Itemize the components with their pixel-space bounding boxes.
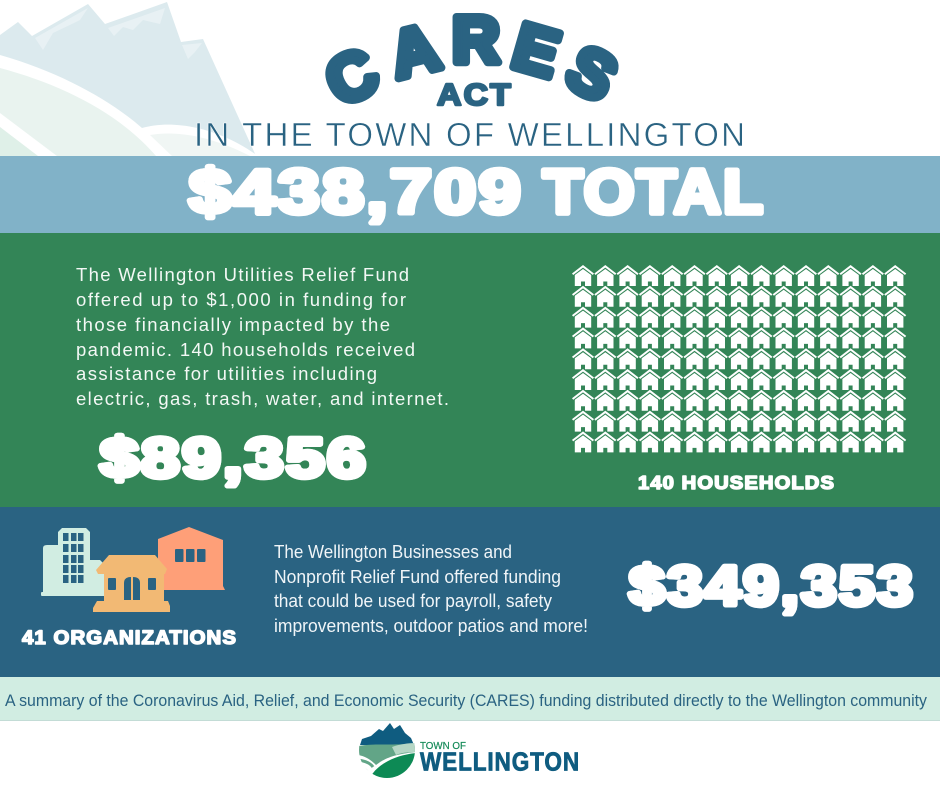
business description text: that could be used for payroll, safety [274, 591, 552, 611]
logo emblem [358, 723, 416, 780]
utilities description text: electric, gas, trash, water, and internet. [76, 388, 449, 409]
title: CARES: E [505, 8, 568, 92]
utilities description text: those financially impacted by the [76, 314, 390, 335]
icon: orange warehouse [158, 527, 225, 590]
business description text: Nonprofit Relief Fund offered funding [274, 567, 561, 587]
utilities description text: The Wellington Utilities Relief Fund [76, 264, 409, 285]
title: CARES: S [555, 30, 629, 116]
total band: $438,709 [189, 158, 523, 227]
business description text: improvements, outdoor patios and more! [274, 616, 588, 636]
subtitle: IN THE TOWN OF WELLINGTON [194, 116, 745, 153]
organizations label: 41 ORGANIZATIONS [22, 628, 237, 649]
title: CARES: R [452, 2, 500, 76]
total band [0, 156, 940, 233]
utilities description text: assistance for utilities including [76, 363, 377, 384]
business description text: The Wellington Businesses and [274, 542, 512, 562]
business description text [274, 542, 588, 636]
panel: business relief [0, 507, 940, 677]
title: ACT: ACT [437, 77, 513, 112]
utilities description text: offered up to $1,000 in funding for [76, 289, 406, 310]
logo wordmark: Wellington: WELLINGTON [420, 746, 580, 776]
logo: Town of Wellington [358, 723, 580, 780]
utilities description text: pandemic. 140 households received [76, 339, 415, 360]
business amount: $349,353 [629, 554, 915, 617]
title: CARES: C [314, 33, 390, 120]
total band: TOTAL [543, 158, 765, 227]
icon grid: households [572, 265, 906, 452]
title: CARES [314, 2, 629, 120]
icon: tan storefront [93, 555, 170, 612]
icon: office tower [41, 528, 107, 596]
households label: 140 HOUSEHOLDS [638, 473, 835, 493]
summary strip [0, 677, 940, 721]
background mountains and hills [0, 2, 258, 156]
utilities amount: $89,356 [100, 426, 368, 489]
utilities description text [76, 264, 449, 409]
title: CARES: A [382, 9, 447, 92]
logo wordmark: town of: TOWN OF [420, 741, 466, 752]
panel: utilities relief [0, 233, 940, 507]
